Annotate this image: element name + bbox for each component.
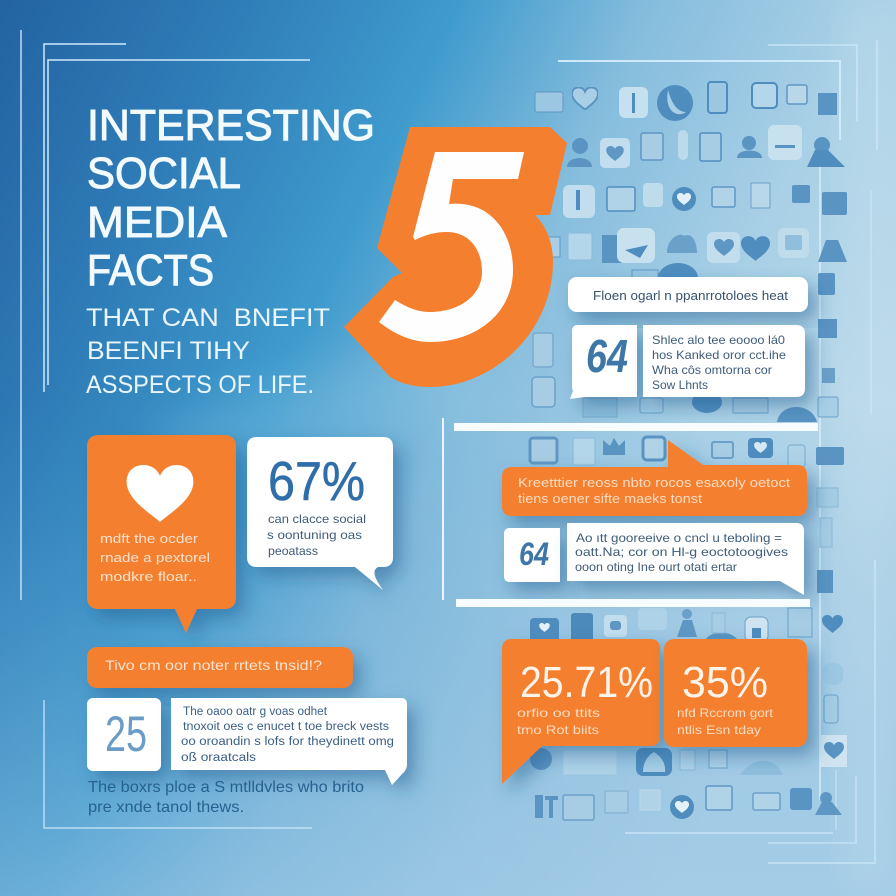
67% text: peoatass bbox=[268, 544, 318, 558]
panel: orange wide bubble: tiens oener sifte maeks tonst bbox=[518, 492, 703, 506]
icon row 8 bbox=[530, 748, 783, 776]
panel: 25.71% bubble: tmo Rot biits bbox=[517, 723, 599, 737]
panel: 25 tile: 25 bbox=[105, 706, 147, 762]
stat: 67%: 67% bbox=[268, 450, 365, 512]
panel: 25.71% bubble bbox=[502, 639, 660, 784]
subtitle: ASSPECTS OF LIFE. bbox=[86, 371, 314, 399]
bottom left text bbox=[88, 779, 364, 816]
bottom left text: pre xnde tanol thews. bbox=[88, 799, 244, 816]
panel: 25 description bubble: oß oraatcals bbox=[181, 752, 256, 764]
panel: 64 description: Shlec alo tee eoooo lá0 bbox=[652, 333, 785, 347]
divider: lower white bar bbox=[456, 599, 810, 607]
panel: 64 tile: 64 bbox=[586, 330, 628, 382]
panel: 64 tile bbox=[570, 325, 637, 399]
panel: orange wide bubble bbox=[502, 440, 807, 516]
icon row 5 bbox=[532, 263, 838, 422]
title: FACTS bbox=[87, 246, 214, 295]
icon row 4 bbox=[548, 228, 847, 263]
icon row 9 bbox=[535, 786, 842, 820]
heart bubble text: mdft the ocder bbox=[100, 531, 199, 546]
panel: white heading bar: Floen ogarl n ppanrrotoloes heat bbox=[593, 289, 789, 303]
panel: second 64 description bbox=[567, 523, 804, 595]
title: INTERESTING bbox=[87, 101, 375, 150]
panel: second 64 description: Ao ıtt gooreeive o cncl u teboling = bbox=[576, 531, 782, 545]
panel: 64 description: hos Kanked oror cct.ihe bbox=[652, 348, 786, 362]
panel: 25 description bubble: tnoxoit oes c enucet t toe breck vests bbox=[183, 721, 389, 733]
panel: orange question bar bbox=[87, 647, 353, 688]
panel: 25 description bubble bbox=[171, 698, 407, 785]
panel: 64 description: Wha côs omtorna cor bbox=[652, 363, 772, 377]
panel: 25 description bubble: oo oroandin s lofs for theydinett omg bbox=[181, 736, 394, 748]
panel: 35% box: nfd Rccrom gort bbox=[677, 706, 774, 720]
subtitle: THAT CAN BNEFIT bbox=[86, 304, 330, 332]
panel: second 64 tile bbox=[504, 528, 560, 582]
67% text: s oontuning oas bbox=[267, 528, 362, 542]
panel: second 64 tile: 64 bbox=[519, 536, 549, 572]
panel: 64 description bbox=[643, 325, 805, 397]
big number 5 bbox=[344, 127, 567, 387]
subtitle bbox=[86, 304, 330, 399]
icon wall: social media glyphs bbox=[530, 82, 847, 820]
icon: heart bbox=[127, 465, 193, 522]
panel: 67% bubble bbox=[247, 437, 393, 590]
67% text: can clacce social bbox=[268, 512, 366, 526]
icon row 6 bbox=[530, 437, 844, 593]
stat: 35%: 35% bbox=[682, 658, 768, 707]
panel: orange heart bubble bbox=[87, 435, 236, 633]
title: SOCIAL bbox=[87, 149, 241, 198]
panel: orange question bar: Tivo cm oor noter rrtets tnsid!? bbox=[105, 657, 322, 673]
panel: 25.71% bubble: orfio oo ttits bbox=[517, 706, 600, 720]
icon row 2 bbox=[567, 125, 845, 168]
panel: 35% box: ntlis Esn tday bbox=[677, 723, 761, 737]
panel: 25 tile bbox=[87, 698, 161, 771]
title bbox=[87, 101, 375, 295]
stat: 25.71%: 25.71% bbox=[520, 658, 653, 707]
panel: 25 description bubble: The oaoo oatr g voas odhet bbox=[183, 706, 328, 718]
panel: second 64 description: oatt.Na; cor on Hl-g eoctotoogives bbox=[575, 545, 788, 559]
heart bubble text: rnade a pextorel bbox=[100, 550, 210, 565]
icon row 7 bbox=[530, 608, 847, 767]
icon row 1 bbox=[535, 82, 837, 121]
subtitle: BEENFI TIHY bbox=[87, 337, 250, 365]
divider: upper white bar bbox=[454, 423, 818, 431]
panel: white heading bar bbox=[568, 277, 808, 312]
67% text bbox=[267, 512, 366, 558]
icon row 3 bbox=[563, 183, 847, 218]
heart bubble text bbox=[100, 531, 210, 584]
panel: second 64 description: ooon oting Ine ourt otati ertar bbox=[575, 560, 737, 574]
bottom left text: The boxrs ploe a S mtlldvles who brito bbox=[88, 779, 364, 796]
title: MEDIA bbox=[87, 198, 228, 247]
panel: orange wide bubble: Kreetttier reoss nbto rocos esaxoly oetoct bbox=[518, 476, 791, 490]
heart bubble text: modkre floar.. bbox=[100, 569, 197, 584]
panel: 64 description: Sow Lhnts bbox=[652, 378, 708, 392]
panel: 35% box bbox=[664, 639, 807, 747]
